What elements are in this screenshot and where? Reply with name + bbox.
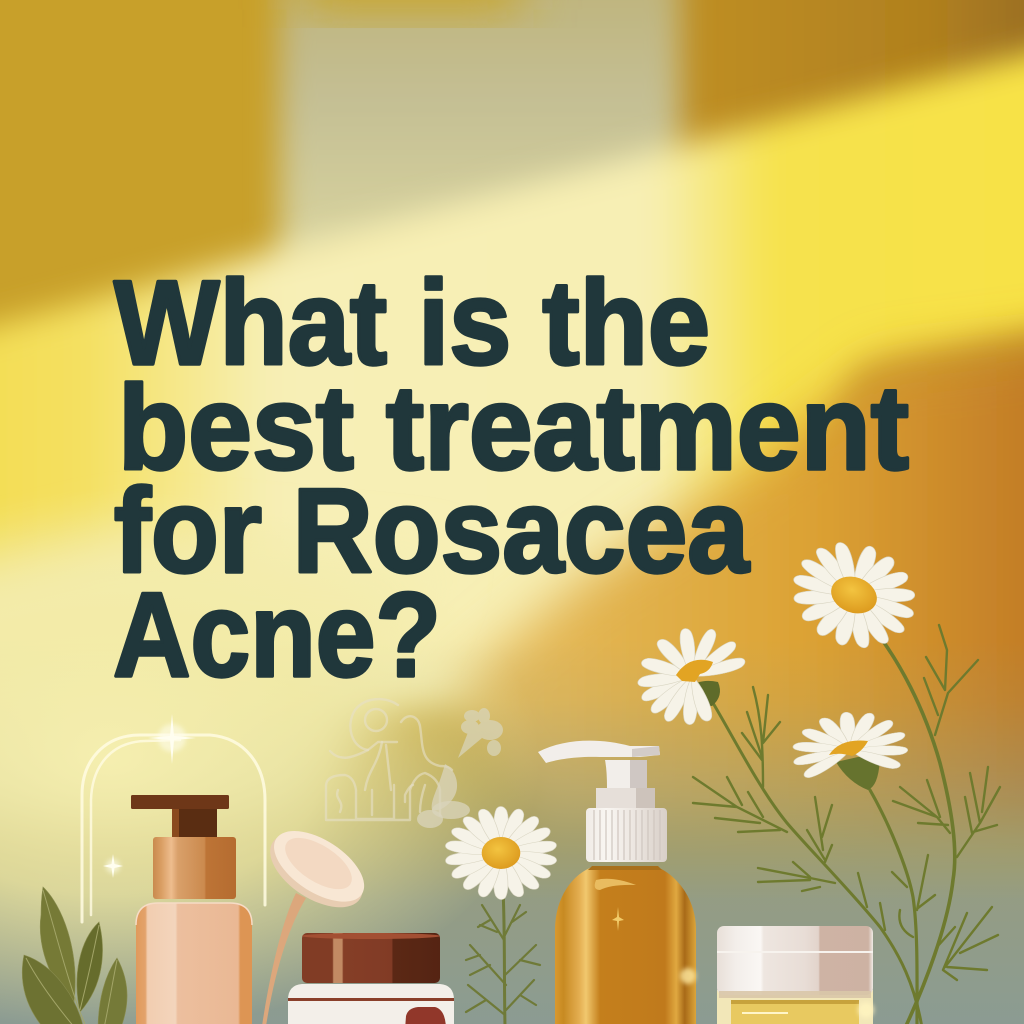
title: for Rosacea [114, 464, 750, 598]
fern stems: center daisy [466, 890, 540, 1024]
title: Acne? [113, 568, 441, 702]
faint flower silhouette [458, 708, 503, 758]
faint line icon: person and arches [326, 699, 470, 828]
amber pump bottle [538, 741, 696, 1024]
sparkle: arch top [148, 714, 196, 764]
pump bottle: peach [131, 795, 252, 1024]
cream jar [717, 926, 874, 1024]
glowing arch outline [82, 735, 265, 922]
brown-lid jar [288, 933, 454, 1024]
title [113, 256, 909, 702]
leaves [22, 887, 127, 1024]
chamomile stems and feathery leaves [693, 620, 1000, 1024]
daisy: middle, tilted [623, 612, 760, 740]
daisy: center [444, 806, 558, 900]
title: What is the [114, 256, 710, 390]
sparkle: arch left [103, 854, 123, 878]
title: best treatment [118, 361, 909, 495]
cosmetic sponge applicator [258, 816, 377, 1024]
daisy: lower, tilted [788, 706, 911, 790]
daisy: top right [777, 525, 930, 665]
